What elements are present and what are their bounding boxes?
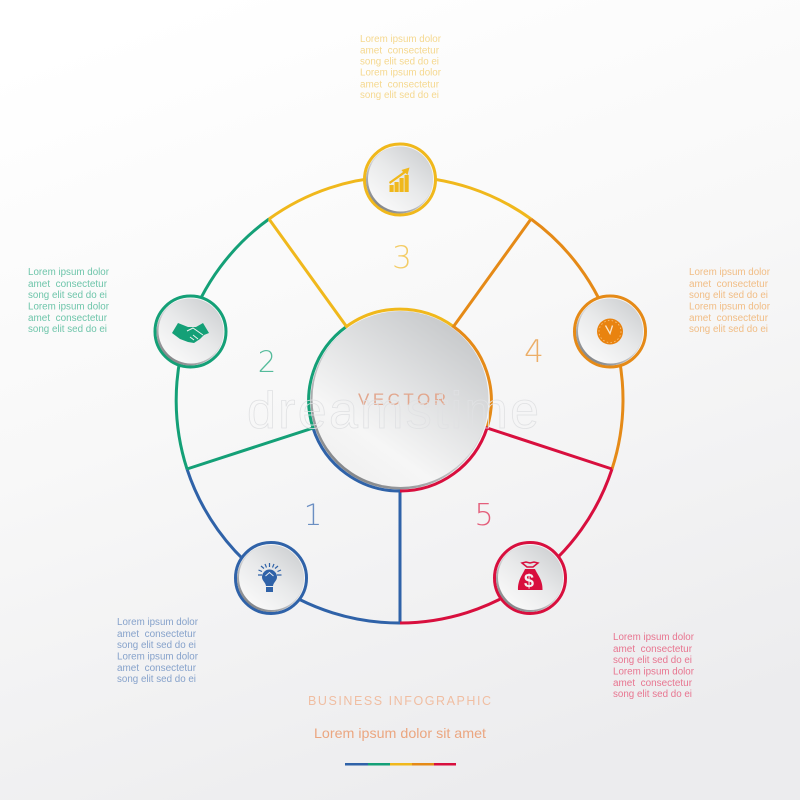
node 2: handshake icon	[155, 296, 226, 367]
text block: segment 3: Lorem ipsum dolor	[360, 68, 442, 78]
node 4: clock icon	[574, 296, 646, 367]
number 1: 1	[304, 498, 322, 532]
text block: segment 2: amet consectetur	[28, 313, 108, 324]
text block: segment 5: Lorem ipsum dolor	[613, 632, 695, 643]
text block: segment 2: amet consectetur	[28, 279, 108, 290]
number 4: 4	[524, 334, 544, 370]
text block: segment 2: song elit sed do ei	[28, 290, 107, 301]
text block: segment 1: song elit sed do ei	[117, 640, 196, 651]
text block: segment 4: amet consectetur	[689, 313, 769, 324]
text block: segment 2: Lorem ipsum dolor	[28, 267, 110, 278]
number 2: 2	[258, 345, 276, 379]
text block: segment 3: amet consectetur	[360, 80, 440, 90]
watermark: dreamstime	[247, 382, 539, 440]
text block: segment 4: Lorem ipsum dolor	[689, 267, 771, 278]
segment 1 outline: blue	[187, 428, 400, 623]
icon: light bulb	[258, 563, 282, 592]
text block: segment 1: song elit sed do ei	[117, 674, 196, 685]
text block: segment 4: song elit sed do ei	[689, 290, 768, 301]
text block: segment 3	[360, 34, 442, 101]
segment numbers	[258, 240, 544, 533]
text block: segment 4: amet consectetur	[689, 279, 769, 290]
icon: money bag: $	[524, 571, 534, 591]
node 5: money bag icon	[494, 542, 566, 614]
icon: clock	[597, 318, 623, 344]
text block: segment 1: amet consectetur	[117, 663, 197, 674]
icon: rising bar chart	[389, 168, 410, 192]
text block: segment 4: Lorem ipsum dolor	[689, 302, 771, 312]
footer colour bar	[345, 763, 456, 766]
text block: segment 4: song elit sed do ei	[689, 324, 768, 335]
text block: segment 5: amet consectetur	[613, 678, 693, 689]
number 5: 5	[474, 498, 494, 533]
text block: segment 4	[689, 267, 771, 335]
text block: segment 2	[28, 267, 110, 335]
text block: segment 5: Lorem ipsum dolor	[613, 666, 695, 678]
segment 3 outline: yellow	[269, 177, 531, 326]
text block: segment 3: song elit sed do ei	[360, 90, 439, 101]
footer subtitle: Lorem ipsum dolor sit amet	[314, 725, 486, 741]
text block: segment 1	[117, 617, 199, 685]
text block: segment 1: Lorem ipsum dolor	[117, 617, 199, 628]
number 3: 3	[392, 240, 412, 276]
text block: segment 2: song elit sed do ei	[28, 324, 107, 335]
footer heading: BUSINESS INFOGRAPHIC	[308, 694, 491, 708]
text block: segment 5	[613, 632, 695, 700]
text block: segment 3: amet consectetur	[360, 46, 440, 56]
segment 4 outline: orange	[454, 219, 623, 469]
text block: segment 1: amet consectetur	[117, 629, 197, 640]
central label: VECTOR	[358, 390, 446, 409]
icon: handshake	[172, 323, 209, 343]
text block: segment 5: amet consectetur	[613, 644, 693, 655]
text block: segment 3: Lorem ipsum dolor	[360, 34, 442, 45]
segment 2 outline: green	[176, 219, 346, 469]
node 1: light bulb icon	[236, 542, 306, 614]
segment 5 outline: red	[400, 428, 612, 623]
central disc	[310, 311, 488, 490]
segment outlines	[176, 177, 623, 623]
text block: segment 2: Lorem ipsum dolor	[28, 302, 110, 312]
text block: segment 5: song elit sed do ei	[613, 689, 692, 700]
node 3: chart icon	[364, 144, 436, 215]
text block: segment 3: song elit sed do ei	[360, 56, 439, 68]
text block: segment 5: song elit sed do ei	[613, 655, 692, 666]
text block: segment 1: Lorem ipsum dolor	[117, 652, 199, 662]
